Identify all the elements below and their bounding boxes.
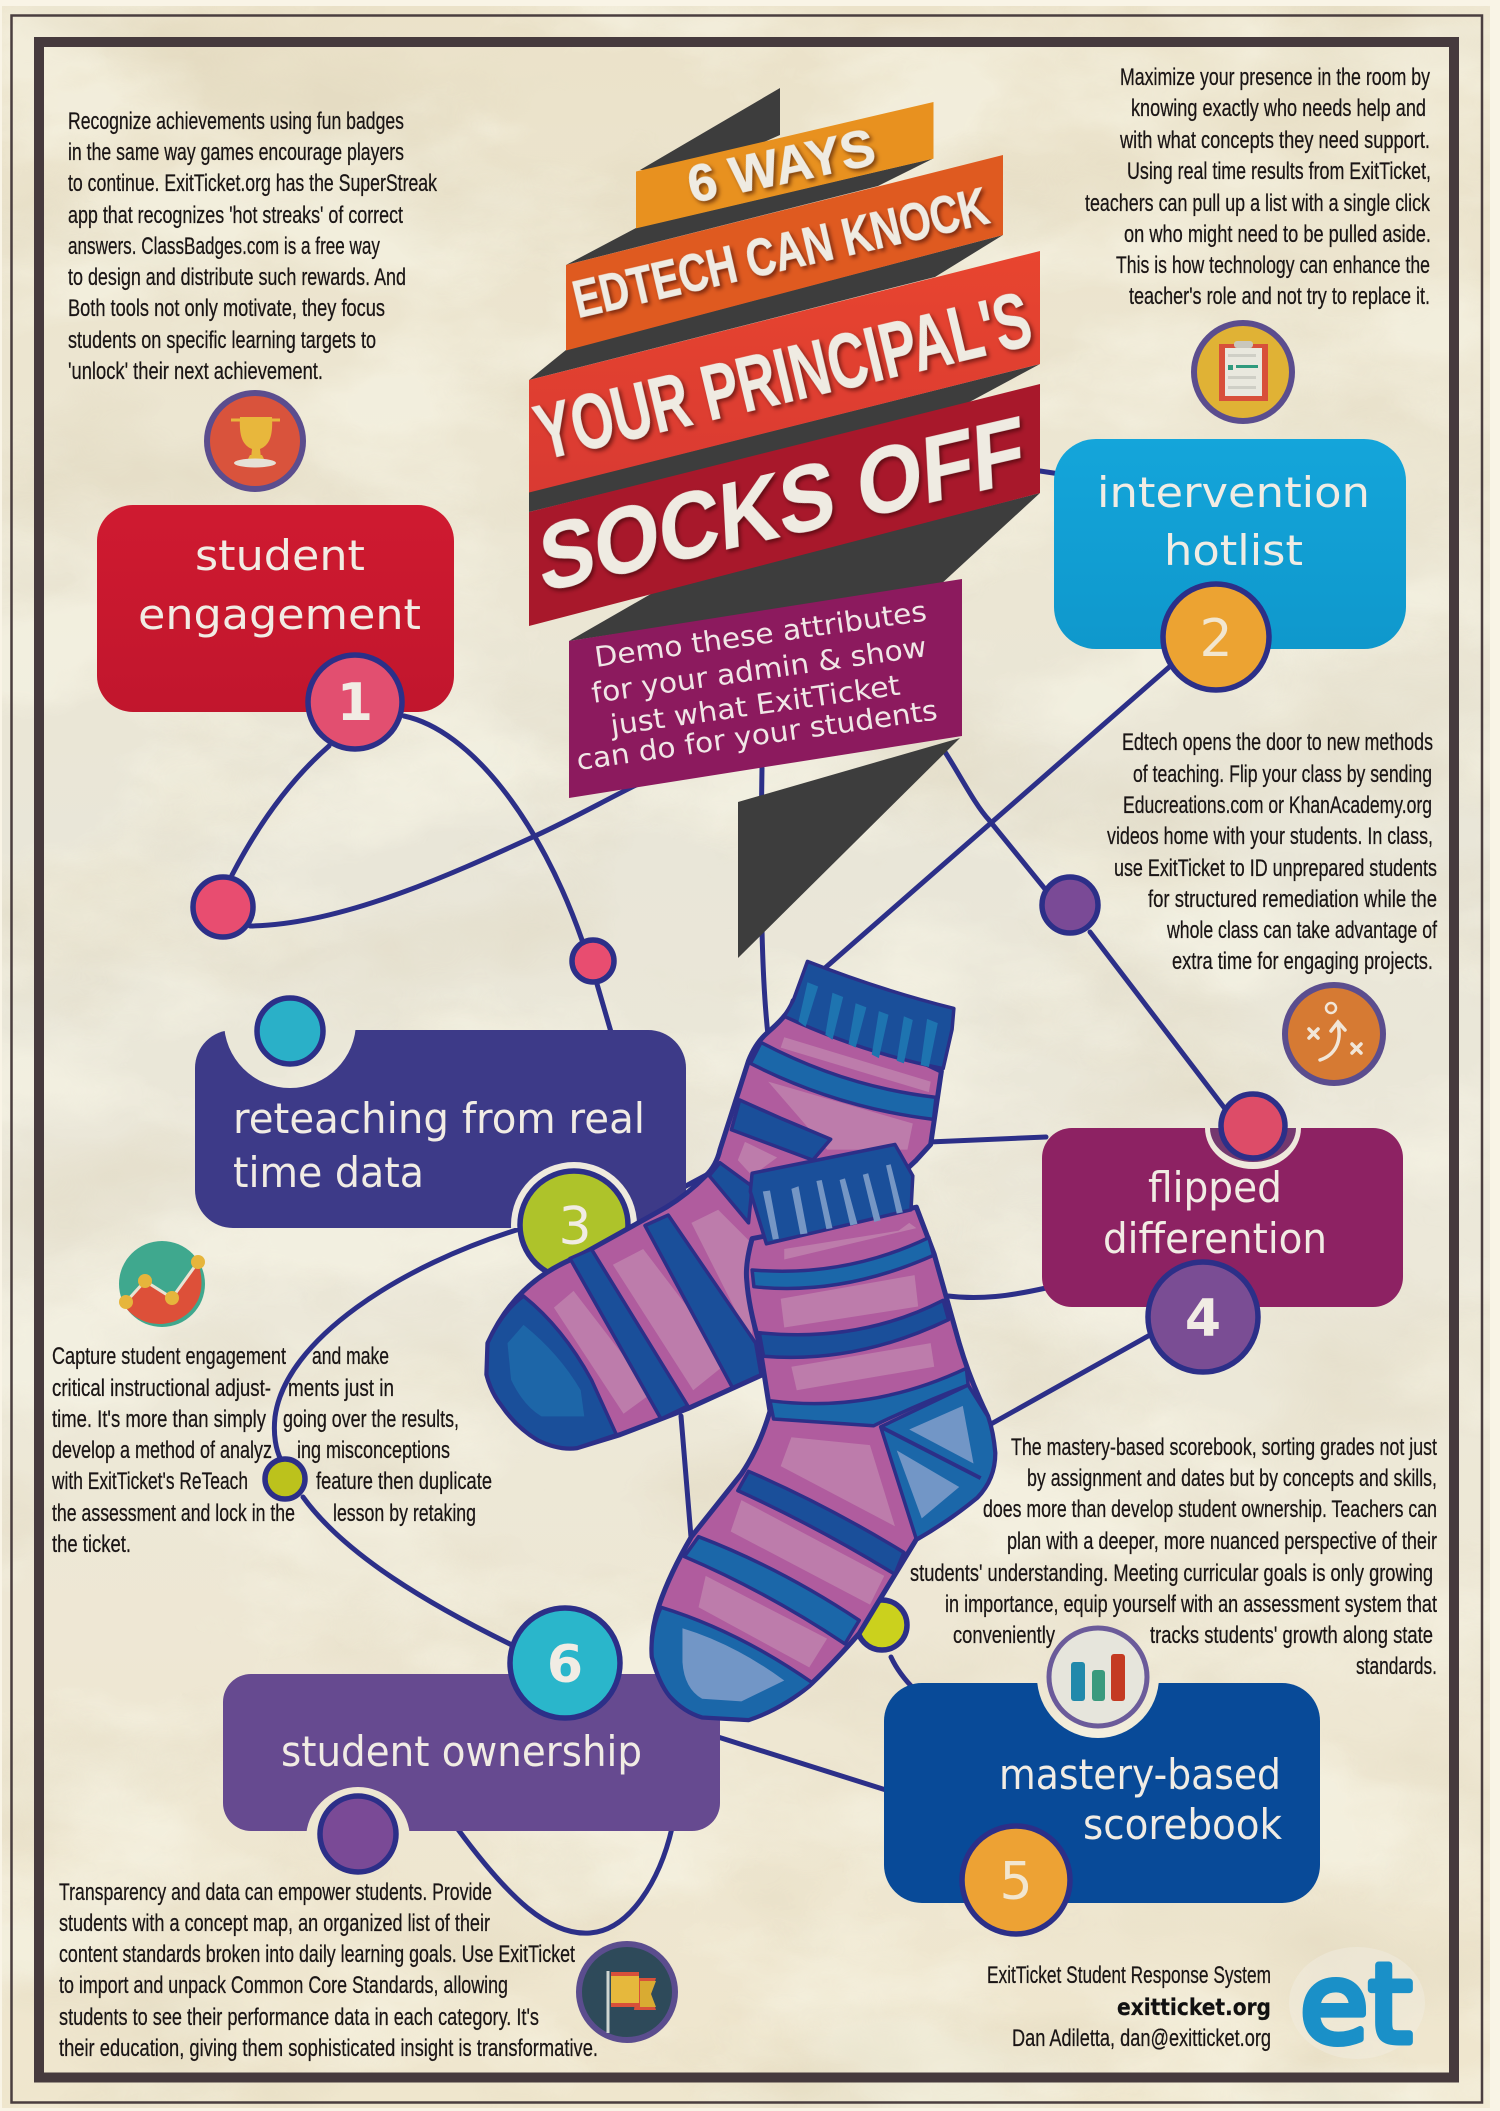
text: reteaching description: ments just in — [288, 1375, 394, 1402]
panel: student engagement — [97, 505, 454, 712]
number badge 5 — [962, 1826, 1070, 1934]
node: purple on ownership panel — [320, 1796, 396, 1872]
text: student engagement description: in the same way games encourage players — [68, 139, 404, 166]
heading: mastery-based scorebook: mastery-based — [999, 1750, 1281, 1799]
number badge 6: 6 — [547, 1635, 583, 1695]
number badge 1: 1 — [337, 673, 373, 733]
panel: mastery-based scorebook — [884, 1683, 1320, 1903]
text: student engagement description: Recognize achievements using fun badges — [68, 108, 404, 135]
number badge 2: 2 — [1199, 609, 1233, 669]
text: student engagement description — [68, 108, 438, 385]
heading: intervention hotlist — [1097, 468, 1370, 575]
text: flipped differentiation description — [1107, 729, 1437, 975]
footer credits — [987, 1962, 1271, 2052]
text: student ownership description: Transparency and data can empower students. Provide — [59, 1879, 492, 1906]
panel: reteaching from real time data — [195, 1030, 686, 1228]
node: pink large — [193, 877, 253, 937]
text: reteaching description: develop a method of analyz — [52, 1437, 272, 1464]
text: reteaching description: time. It's more than simply — [52, 1406, 266, 1433]
footer credits: exitticket.org — [1117, 1995, 1271, 2021]
text: reteaching description: the ticket. — [52, 1531, 131, 1558]
number badge 3: 3 — [558, 1197, 592, 1257]
number badge 4: 4 — [1185, 1289, 1221, 1349]
heading: student engagement — [138, 531, 421, 639]
text: reteaching description: critical instructional adjust- — [52, 1375, 271, 1402]
node: yellow — [857, 1600, 907, 1650]
text: reteaching description: the assessment and lock in the — [52, 1500, 295, 1527]
text: student engagement description: app that recognizes 'hot streaks' of correct — [68, 202, 403, 229]
node: pink on flipped panel — [1221, 1094, 1285, 1158]
text: intervention hotlist description — [1085, 64, 1431, 310]
back sock — [487, 961, 954, 1448]
title: edtech can knock: EDTECH CAN KNOCK — [567, 177, 994, 330]
text: student ownership description — [59, 1879, 598, 2062]
text: student ownership description: students with a concept map, an organized list of their — [59, 1910, 490, 1937]
text: student ownership description: to import and unpack Common Core Standards, allowing — [59, 1972, 508, 1999]
subtitle: Demo these attributes — [592, 595, 929, 674]
text: reteaching description: Capture student engagement — [52, 1343, 286, 1370]
front sock — [652, 1144, 995, 1720]
heading: intervention hotlist: intervention — [1097, 468, 1370, 517]
heading: flipped differention: flipped — [1148, 1163, 1282, 1212]
panel: flipped differention — [1042, 1128, 1403, 1307]
panel: student ownership — [223, 1674, 720, 1831]
text: student engagement description: to continue. ExitTicket.org has the SuperStreak — [68, 170, 438, 197]
text: reteaching description: lesson by retaking — [333, 1500, 476, 1527]
heading: student engagement: engagement — [138, 590, 421, 639]
node: pink small — [572, 940, 614, 982]
title: your principal's: YOUR PRINCIPAL'S — [527, 274, 1039, 477]
title: socks off: SOCKS OFF — [537, 396, 1026, 612]
logo: et: et — [1300, 1940, 1412, 2068]
subtitle: for your admin & show — [589, 630, 929, 710]
title ribbons — [527, 88, 1040, 958]
footer credits: Dan Adiletta, dan@exitticket.org — [1012, 2025, 1271, 2052]
text: reteaching description: ing misconceptions — [297, 1437, 450, 1464]
text: reteaching description: with ExitTicket's ReTeach — [51, 1468, 248, 1495]
subtitle: can do for your students — [574, 694, 939, 777]
illustration: socks — [487, 961, 995, 1720]
text: student engagement description: to design and distribute such rewards. And — [68, 264, 406, 291]
heading: student ownership: student ownership — [281, 1727, 642, 1776]
text: student ownership description: content standards broken into daily learning goals. Use ExitTicket — [59, 1941, 575, 1968]
subtitle: just what ExitTicket — [607, 669, 902, 742]
number badge 6 — [510, 1608, 620, 1718]
icon: line chart — [119, 1241, 205, 1327]
text: mastery-based scorebook description — [910, 1434, 1437, 1680]
text: student engagement description: Both tools not only motivate, they focus — [68, 295, 385, 322]
icon: playbook — [1285, 985, 1383, 1083]
footer credits: ExitTicket Student Response System — [987, 1962, 1271, 1989]
text: reteaching description: and make — [312, 1343, 389, 1370]
heading: mastery-based scorebook — [999, 1750, 1283, 1849]
text: student engagement description: students on specific learning targets to — [68, 327, 376, 354]
number badge 1 — [308, 655, 402, 749]
text: reteaching description: feature then duplicate — [316, 1468, 492, 1495]
text: student engagement description: 'unlock' their next achievement. — [68, 358, 323, 385]
heading: flipped differention: differention — [1103, 1214, 1327, 1263]
text: reteaching description: going over the results, — [283, 1406, 459, 1433]
icon: bar chart — [1049, 1628, 1147, 1726]
heading: student engagement: student — [195, 531, 365, 580]
heading: reteaching: reteaching from real — [233, 1094, 645, 1143]
text: mastery-based scorebook description: conveniently — [953, 1622, 1055, 1649]
node: olive — [265, 1459, 305, 1499]
number badge 2 — [1163, 584, 1269, 690]
icon: clipboard — [1194, 323, 1292, 421]
panel: intervention hotlist — [1054, 439, 1406, 649]
subtitle — [574, 595, 939, 777]
heading: intervention hotlist: hotlist — [1164, 526, 1303, 575]
text: reteaching description — [51, 1343, 492, 1558]
node: teal — [257, 998, 323, 1064]
heading: flipped differention — [1103, 1163, 1327, 1263]
connector lines — [232, 471, 1226, 1933]
node: purple — [1042, 877, 1098, 933]
text: student engagement description: answers. ClassBadges.com is a free way — [68, 233, 380, 260]
heading: mastery-based scorebook: scorebook — [1083, 1800, 1283, 1849]
icon: trophy — [207, 393, 303, 489]
text: student ownership description: students to see their performance data in each category. It's — [59, 2004, 539, 2031]
number badge 4 — [1148, 1262, 1258, 1372]
icon: flag — [579, 1944, 675, 2040]
text: mastery-based scorebook description: standards. — [1356, 1653, 1437, 1680]
heading: reteaching: time data — [233, 1148, 424, 1197]
number badge 5: 5 — [999, 1852, 1033, 1912]
title: 6 ways: 6 WAYS — [682, 119, 880, 215]
number badge 3 — [511, 1162, 637, 1272]
text: student ownership description: their education, giving them sophisticated insight is transformative. — [59, 2035, 598, 2062]
heading: reteaching — [233, 1094, 645, 1197]
